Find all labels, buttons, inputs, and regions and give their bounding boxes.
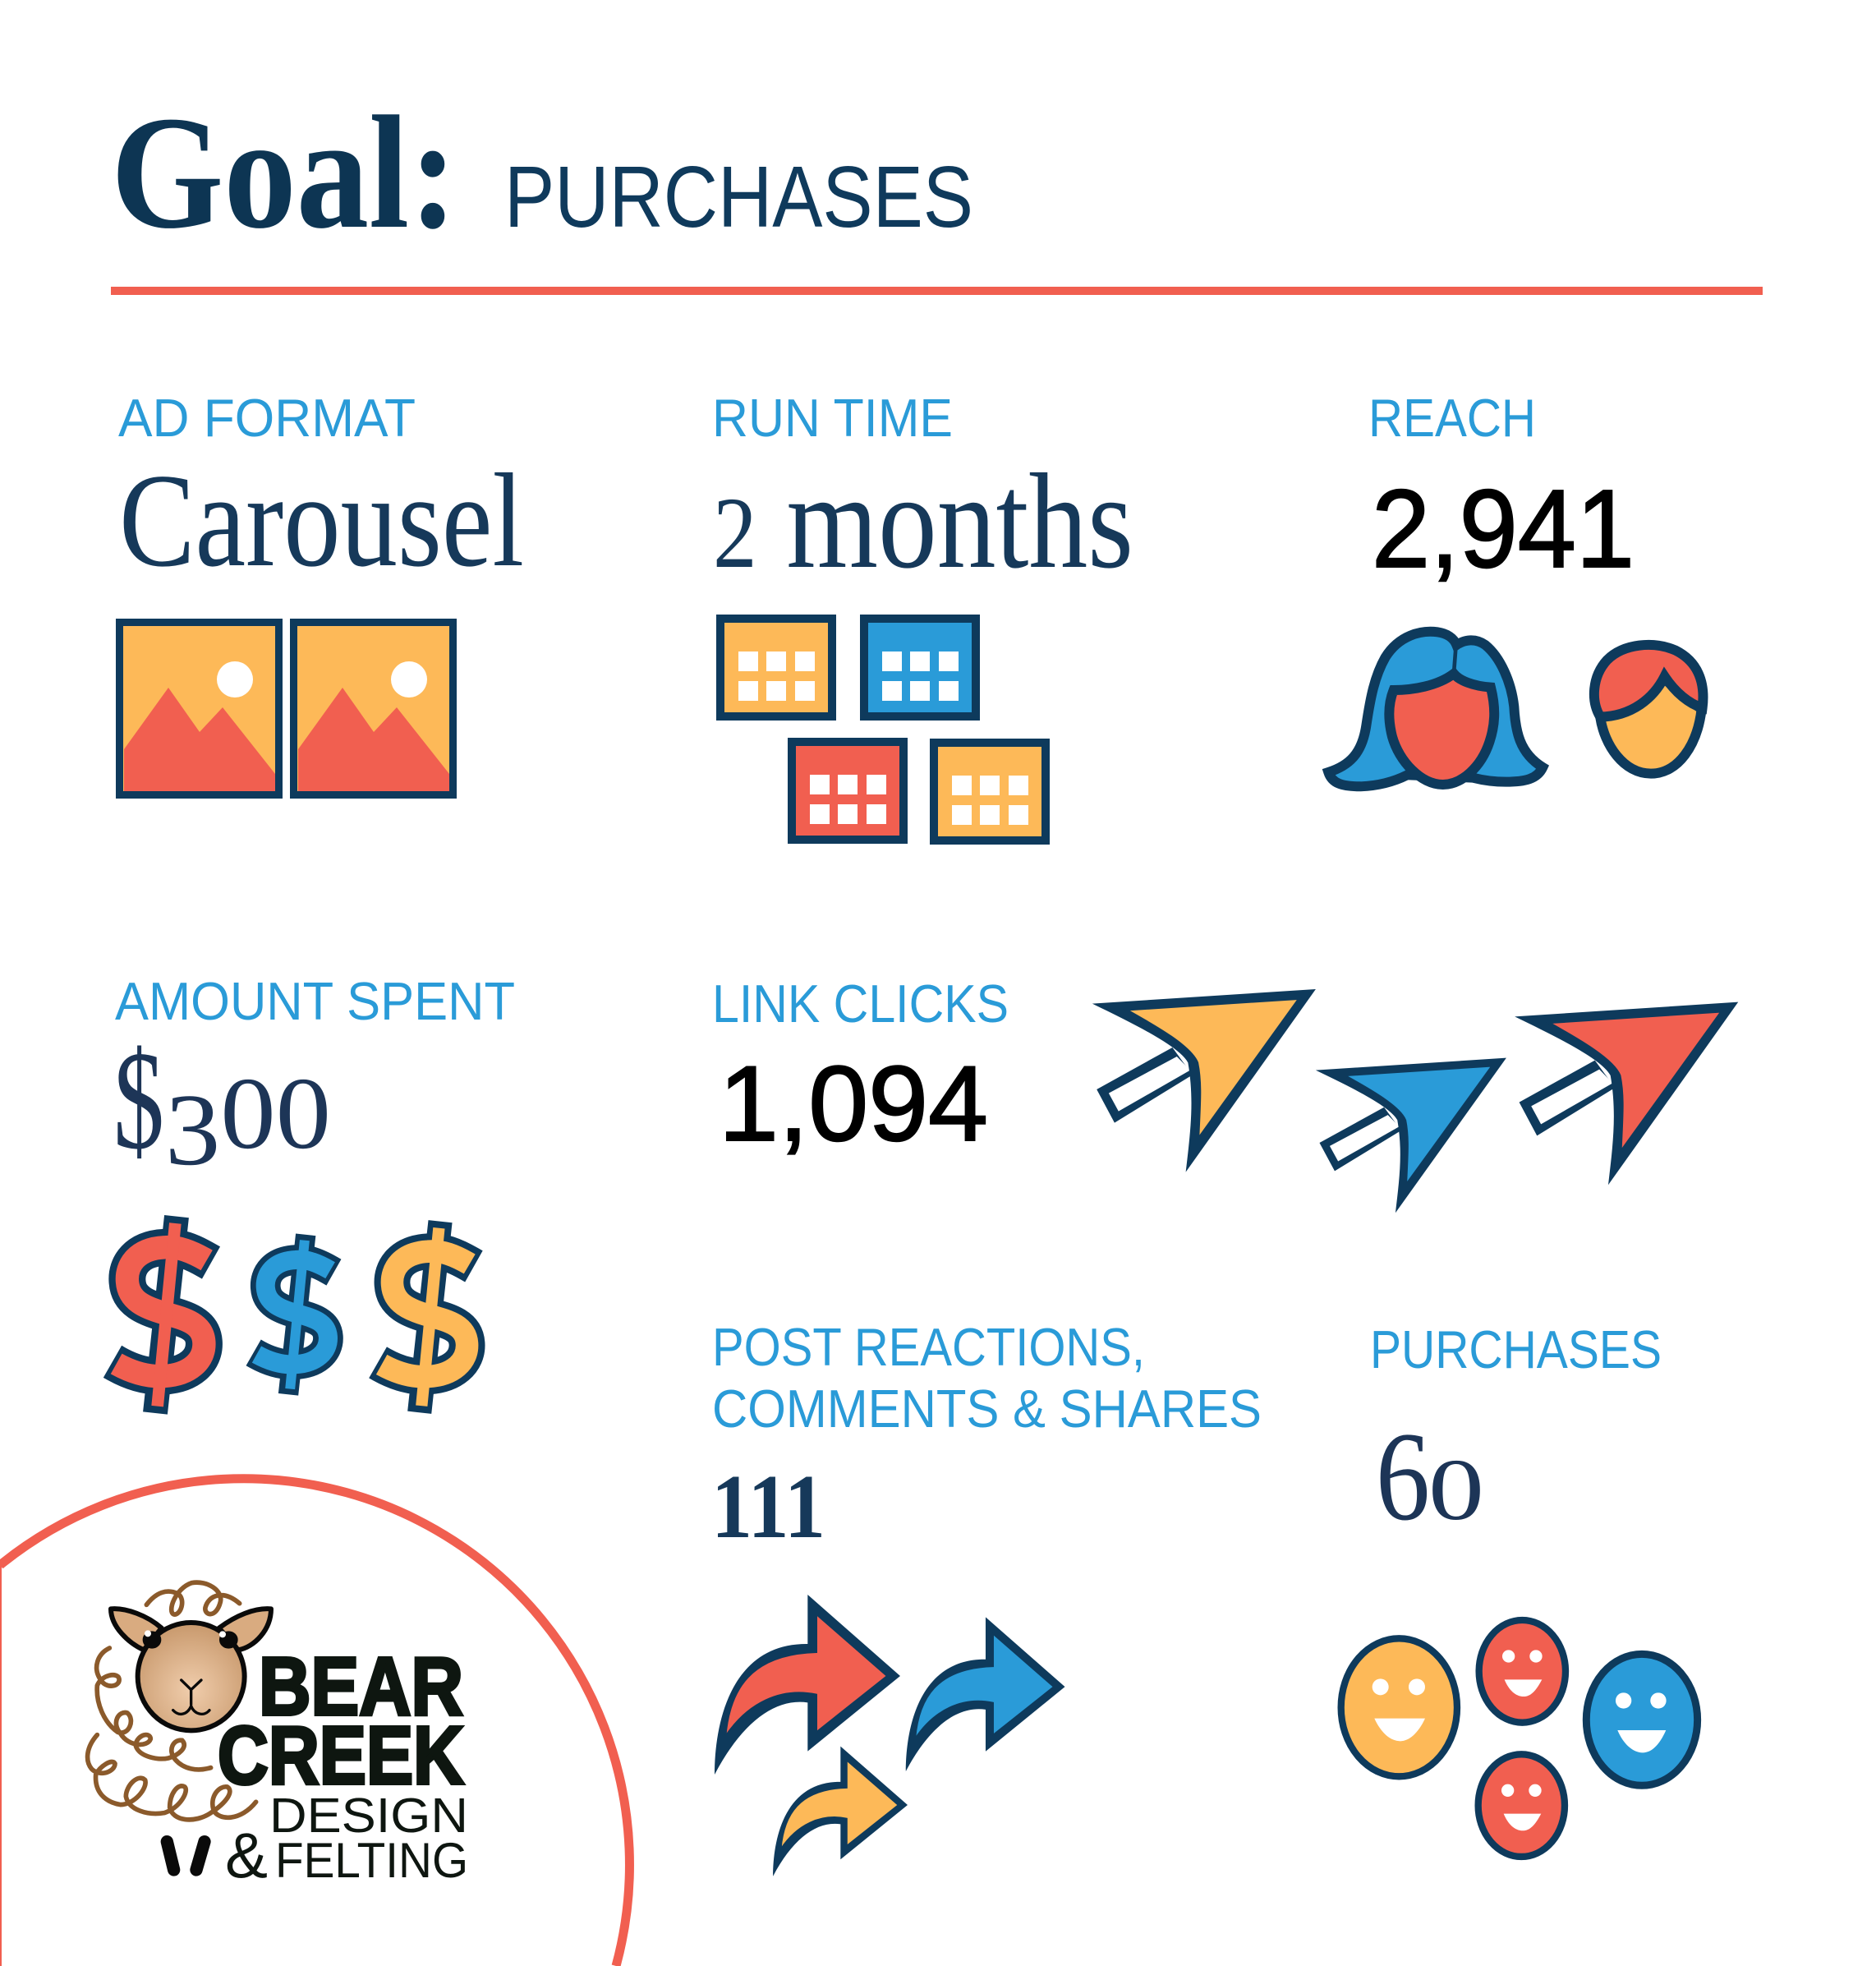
value: 1,094: 1,094 [719, 1043, 988, 1163]
value: 2 months: 2 months [713, 445, 1133, 596]
label: link clicks: LINK CLICKS [712, 974, 1009, 1034]
value: 2,941: 2,941 [1372, 467, 1635, 591]
sheep legs [167, 1842, 205, 1870]
icon: dollar signs [113, 1217, 474, 1413]
subtitle: purchases: PURCHASES [504, 149, 973, 246]
icon: people heads [1328, 632, 1703, 786]
label: post reactions, comments and shares: POST REACTIONS, [712, 1317, 1145, 1377]
value: 60 [1376, 1406, 1484, 1547]
circle outline [0, 1479, 629, 1966]
value: 60: 6 [1376, 1406, 1430, 1547]
value: $300 [113, 1023, 331, 1187]
label: post reactions, comments and shares [712, 1317, 1262, 1439]
panel: reach [1328, 388, 1703, 786]
logo wordmark: CREEK [218, 1710, 464, 1802]
label: reach: REACH [1368, 388, 1536, 448]
label: ad format: AD FORMAT [118, 388, 416, 448]
sheep wool curls [88, 1582, 256, 1820]
logo wordmark [218, 1641, 468, 1891]
header rule [111, 287, 1763, 295]
panel: amount spent [113, 971, 515, 1413]
label: purchases: PURCHASES [1370, 1319, 1662, 1379]
icon: cursors [1092, 989, 1738, 1213]
panel: ad format [118, 388, 524, 795]
panel: run time [712, 388, 1133, 840]
icon: picture frames [120, 623, 453, 795]
label: run time: RUN TIME [712, 388, 953, 448]
value: $300: $ [113, 1023, 164, 1179]
logo wordmark: FELTING [275, 1833, 468, 1888]
value: 60: 0 [1428, 1442, 1484, 1539]
value: 111: 111 [711, 1457, 825, 1558]
logo wordmark: BEAR [259, 1641, 463, 1733]
icon: calendars [720, 619, 1046, 840]
sheep eye highlights [145, 1630, 226, 1637]
label: amount spent: AMOUNT SPENT [115, 971, 515, 1031]
value: $300: 3 [165, 1074, 220, 1187]
label: post reactions, comments and shares: COMMENTS & SHARES [712, 1379, 1262, 1439]
logo wordmark: & [225, 1819, 268, 1891]
panel: logo circle [0, 1479, 629, 1966]
logo wordmark: DESIGN [269, 1789, 468, 1843]
value: $300: 00 [220, 1057, 331, 1171]
panel: purchases [1341, 1319, 1698, 1857]
header [111, 82, 1763, 295]
icon: share arrows [715, 1595, 1065, 1876]
title: Goal: Goal: [111, 82, 458, 262]
panel: post reactions [711, 1317, 1262, 1876]
panel: link clicks [712, 974, 1738, 1213]
icon: smiley faces [1341, 1620, 1698, 1857]
sheep head [111, 1609, 271, 1730]
logo: sheep illustration [88, 1582, 271, 1870]
value: carousel: Carousel [119, 447, 524, 595]
